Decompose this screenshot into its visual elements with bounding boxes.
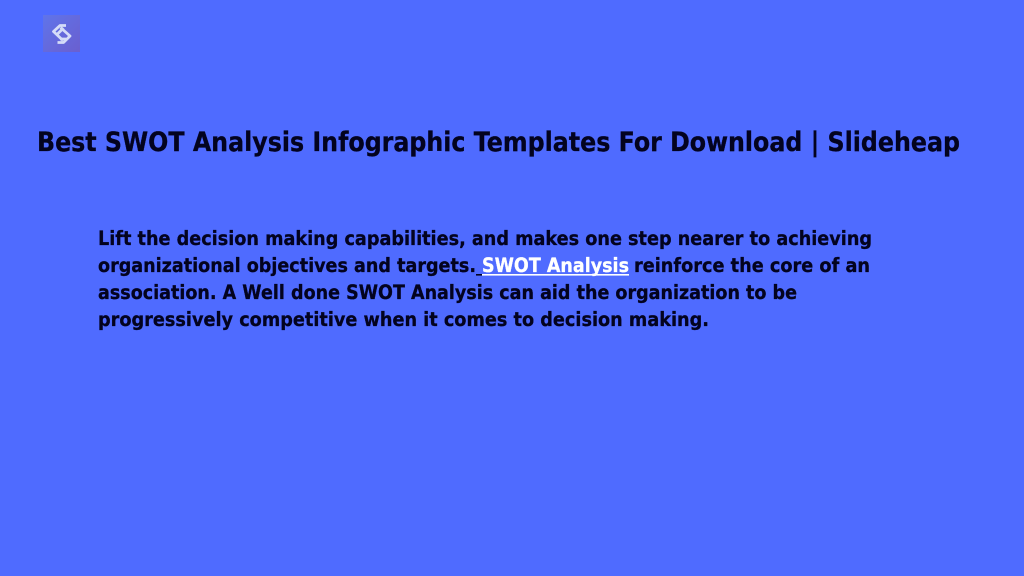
text block: description: organizational objectives and targets.: [98, 254, 476, 277]
text block: description: association. A Well done SWOT Analysis can aid the organization to be: [98, 281, 797, 304]
text block: description: reinforce the core of an: [634, 254, 870, 277]
text block: description: progressively competitive when it comes to decision making.: [98, 308, 709, 331]
icon: Slideheap logo: [43, 15, 80, 52]
text block: description: [98, 227, 872, 331]
link: SWOT Analysis: SWOT Analysis: [482, 254, 629, 277]
text block: description: Lift the decision making capabilities, and makes one step nearer to achieving: [98, 227, 872, 250]
